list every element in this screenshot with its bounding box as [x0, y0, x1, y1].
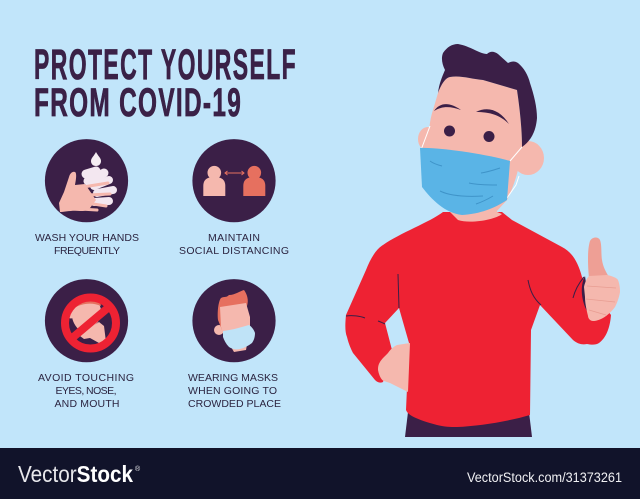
prohibition sign [65, 298, 116, 348]
title [34, 42, 296, 126]
thumbs up hand [584, 237, 620, 321]
title: PROTECT YOURSELF [34, 42, 296, 89]
label: wearing masks: WHEN GOING TO [188, 385, 277, 397]
label: avoid touching: AVOID TOUCHING [38, 372, 134, 384]
footer bar [0, 448, 640, 499]
foam fingers [86, 171, 113, 202]
hair [438, 44, 537, 147]
face [422, 76, 522, 212]
red sweater [345, 212, 611, 427]
footer registered mark: ® [135, 465, 141, 473]
icon: social distancing [192, 139, 276, 222]
footer logo: VectorStock [18, 461, 133, 487]
left hand on hip [378, 343, 410, 392]
label: social distancing: SOCIAL DISTANCING [179, 245, 289, 257]
label: wash hands: FREQUENTLY [54, 245, 120, 257]
icon: wash hands [45, 139, 128, 222]
right ear [512, 141, 544, 175]
mask folds [430, 161, 500, 204]
pink fingers [80, 183, 110, 210]
sweater creases [346, 274, 584, 324]
label: avoid touching: AND MOUTH [54, 398, 120, 410]
label: avoid touching: EYES, NOSE, [56, 385, 116, 397]
character: man with mask [345, 44, 620, 437]
icon: wearing mask [192, 279, 276, 362]
label: wearing masks [188, 372, 281, 410]
mask straps [421, 126, 522, 198]
eyebrows and eyes [434, 104, 509, 142]
face mask [420, 148, 510, 215]
water drop [91, 152, 101, 166]
icon: avoid touching [45, 279, 128, 362]
neck [450, 200, 502, 222]
label: social distancing [179, 232, 289, 257]
pink hand [59, 172, 96, 212]
left ear [418, 127, 438, 151]
ear [68, 312, 74, 318]
footer url: VectorStock.com/31373261 [467, 470, 622, 485]
touching hand [80, 322, 106, 343]
label: wash hands [35, 232, 139, 257]
title: FROM COVID-19 [34, 81, 241, 126]
head [72, 299, 101, 332]
label: wash hands: WASH YOUR HANDS [35, 232, 139, 244]
cuff [582, 276, 590, 311]
label: wearing masks: WEARING MASKS [188, 372, 278, 384]
label: wearing masks: CROWDED PLACE [188, 398, 281, 410]
pants [405, 412, 532, 437]
label: social distancing: MAINTAIN [208, 232, 260, 244]
label: avoid touching [38, 372, 134, 410]
